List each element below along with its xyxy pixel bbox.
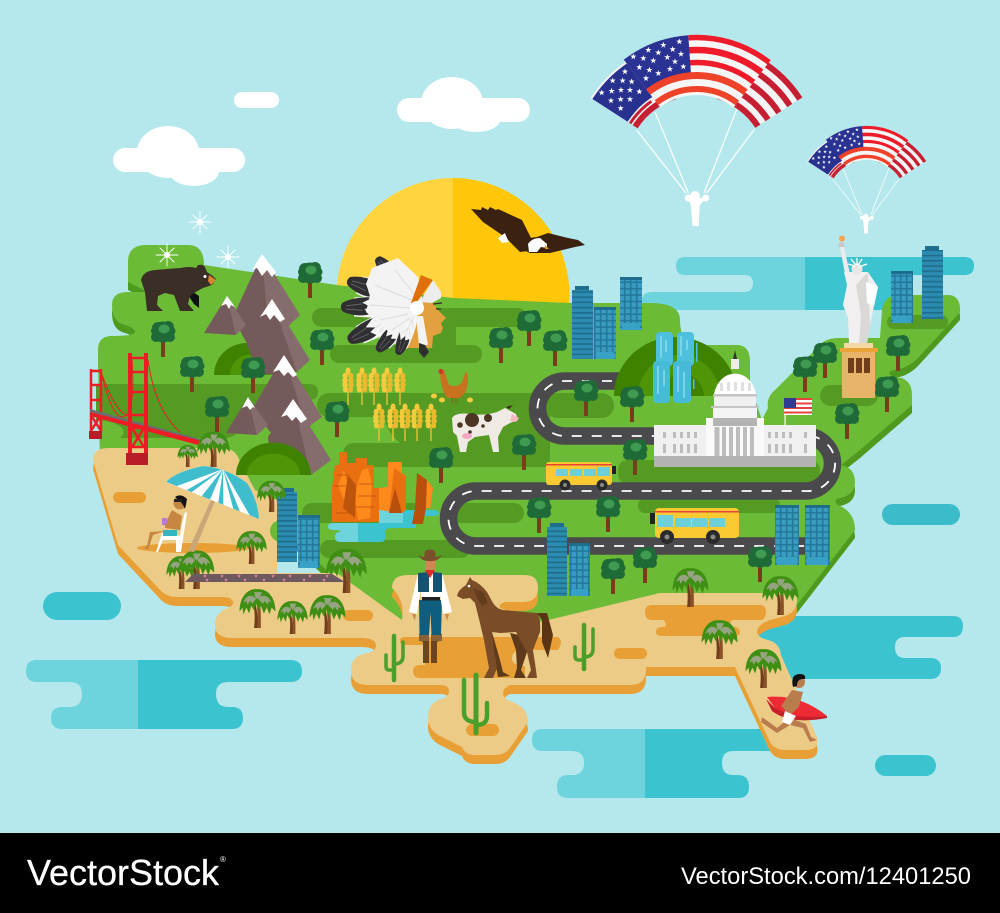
- horse: [457, 577, 553, 678]
- cloud centre: [397, 77, 530, 132]
- small parachute with US flag: [772, 105, 961, 294]
- map land: green: [98, 245, 960, 640]
- watermark brand: VectorStock: [27, 852, 220, 893]
- canyon orange rocks: [332, 452, 433, 524]
- footer bar: [0, 833, 1000, 913]
- cloud left: [113, 126, 245, 186]
- black bear: [141, 265, 216, 311]
- palm trees: [166, 432, 798, 688]
- capitol building: [654, 350, 816, 467]
- mountains: [204, 254, 331, 475]
- golden gate bridge: [89, 353, 202, 465]
- hill in front of mountains: [236, 443, 311, 475]
- map land: green shadow: [98, 253, 960, 648]
- large parachute with US flag: [529, 0, 865, 334]
- water: bottom right pool: [875, 755, 936, 776]
- native american chief with feather headdress: [341, 252, 446, 358]
- statue of liberty pedestal: [840, 343, 878, 398]
- green lobe beside tower: [270, 520, 292, 542]
- hills behind mountains: [214, 343, 280, 375]
- road: [448, 381, 835, 546]
- dome hill behind capitol: [614, 337, 737, 396]
- cacti: [386, 625, 593, 733]
- waterfalls: [653, 332, 698, 403]
- registered mark: ®: [220, 855, 226, 864]
- map land: sand shadow: [93, 457, 818, 764]
- eagle: [471, 207, 585, 253]
- school bus upper: [546, 462, 616, 490]
- water: bottom: [532, 729, 790, 798]
- cow: [452, 405, 519, 452]
- water: lower left: [26, 660, 302, 729]
- dark green field patches: [96, 308, 948, 558]
- watermark url: VectorStock.com/12401250: [681, 863, 971, 890]
- water: left pool: [43, 592, 121, 620]
- hen and chicks: [431, 369, 473, 403]
- buildings: [277, 246, 943, 596]
- canyon water: [328, 510, 439, 542]
- water: top right: [642, 257, 974, 310]
- small US flag on pole: [784, 398, 812, 426]
- map land: sand: [93, 448, 818, 755]
- wheat field: [342, 368, 437, 441]
- water: right small pool: [882, 504, 960, 525]
- orange sand patches: [113, 492, 766, 736]
- school bus lower: [650, 508, 739, 544]
- trees: [151, 262, 910, 594]
- cowboy: [409, 550, 452, 663]
- sparkles: [156, 211, 239, 268]
- water: lower right: [755, 616, 963, 679]
- statue of liberty: [838, 236, 878, 343]
- sun: [336, 178, 570, 320]
- beach umbrella: [166, 466, 259, 552]
- surfer with red surfboard: [761, 674, 827, 742]
- man on beach chair: [144, 495, 187, 552]
- cloud small: [234, 92, 279, 108]
- walk of fame path: [185, 574, 345, 582]
